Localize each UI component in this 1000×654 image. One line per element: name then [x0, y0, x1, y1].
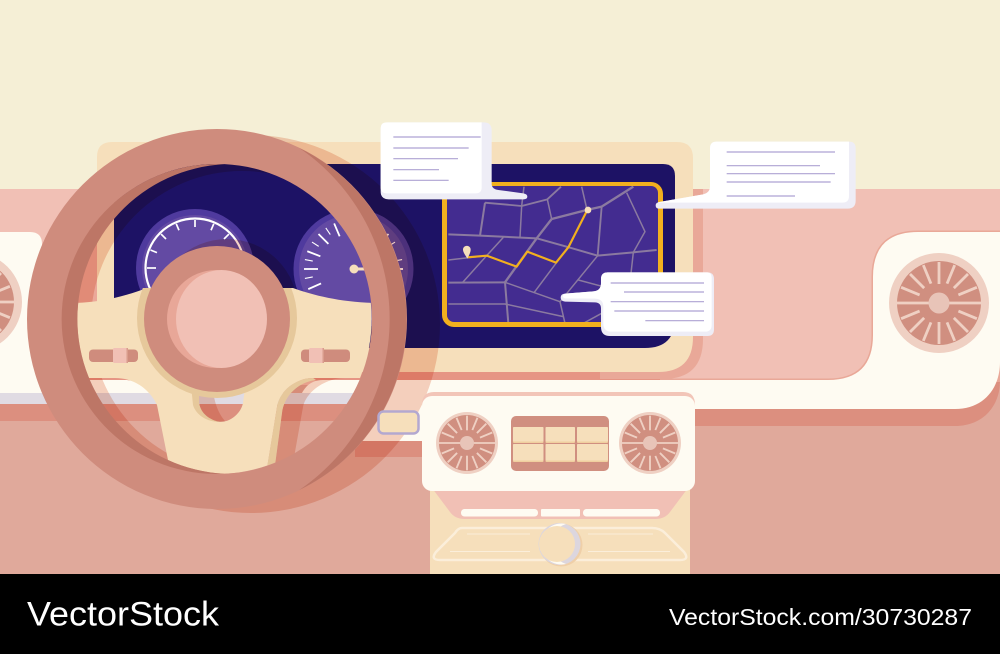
spoke shadow — [273, 378, 345, 480]
steering wheel spokes — [70, 288, 380, 480]
dark screen — [114, 164, 675, 348]
background: dashboard lower — [0, 385, 1000, 575]
salmon shadow strip left — [0, 404, 362, 421]
right dash white trim — [298, 232, 1000, 441]
console pink trapezoid — [432, 488, 688, 519]
panel shadow — [600, 189, 703, 379]
climate panel — [511, 416, 609, 471]
hub ring — [144, 246, 290, 392]
speech bubble 2 — [656, 142, 856, 209]
destination dot — [585, 207, 591, 213]
footer logo: VectorStock — [27, 596, 220, 634]
wheel inner crescent — [62, 164, 224, 474]
right air vent — [889, 253, 989, 353]
hub backing — [137, 288, 297, 398]
small button — [378, 412, 418, 434]
speech bubble 1 — [381, 122, 527, 199]
small vent right — [619, 412, 681, 474]
console control panel — [422, 396, 695, 491]
wheel shadow ring — [62, 135, 440, 513]
gauge needle — [350, 264, 368, 274]
right switch — [301, 348, 350, 363]
background: windshield — [0, 0, 1000, 190]
right gauge — [294, 209, 414, 329]
hub shadow — [156, 239, 298, 381]
left switch — [89, 348, 138, 363]
footer bar — [0, 574, 1000, 654]
left air vent — [0, 252, 22, 352]
spoke base — [70, 288, 380, 480]
salmon line under panel — [88, 371, 660, 380]
right dash edge line — [600, 230, 1000, 382]
left gauge — [136, 209, 254, 327]
map frame — [442, 182, 663, 327]
speech bubble 3 — [561, 272, 714, 336]
right dash underside — [600, 380, 1000, 426]
lavender strip — [0, 393, 362, 404]
steering wheel ring — [27, 129, 407, 509]
hub inner shade — [167, 270, 265, 368]
footer image id: VectorStock.com/30730287 — [669, 604, 972, 630]
salmon left of panel — [75, 225, 100, 310]
console buttons — [461, 509, 660, 516]
wheel outer crescent — [299, 148, 406, 490]
instrument panel — [97, 142, 693, 372]
U cutout shadow — [198, 385, 228, 424]
console outline panel — [434, 528, 686, 560]
background: dashboard upper — [0, 189, 1000, 389]
map roads and route — [448, 187, 657, 323]
map area — [447, 186, 658, 322]
left dash white trim — [0, 232, 150, 393]
small vent left — [436, 412, 498, 474]
salmon shadow strip under centre — [355, 441, 435, 457]
centre U cutout shade — [192, 394, 220, 422]
console knob — [538, 523, 582, 566]
console top edge — [422, 392, 695, 420]
hub centre — [176, 270, 267, 368]
spoke side shade — [268, 378, 316, 466]
start pin — [463, 246, 471, 259]
console lower — [430, 485, 690, 575]
